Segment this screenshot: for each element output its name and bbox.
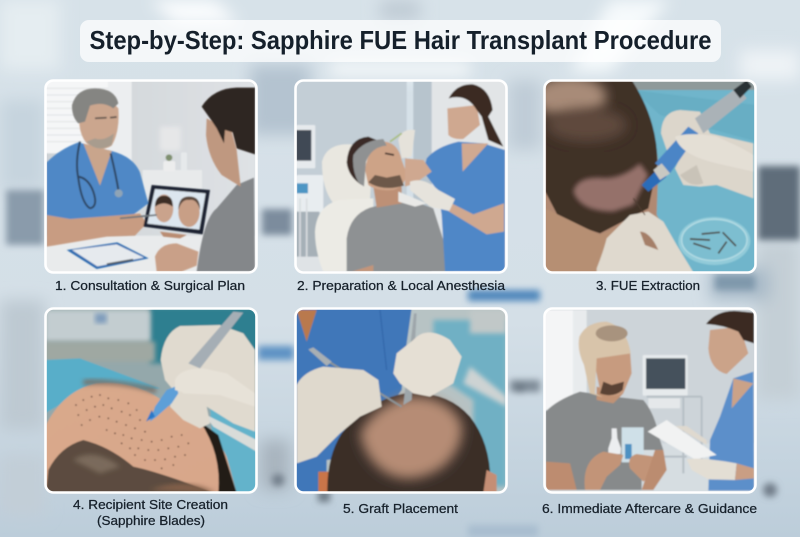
caption 4: (Sapphire Blades) — [97, 513, 205, 528]
petri dish — [678, 217, 750, 265]
caption 4 — [73, 497, 228, 528]
serum and pack — [608, 428, 621, 454]
nurse — [423, 142, 505, 272]
caption 1: 1. Consultation & Surgical Plan — [55, 278, 245, 293]
panel: immediate aftercare and guidance — [543, 307, 757, 493]
caption 6: 6. Immediate Aftercare & Guidance — [542, 501, 757, 516]
scalp — [45, 383, 237, 493]
bandage — [579, 322, 631, 397]
head — [327, 393, 490, 493]
clipboard — [67, 242, 149, 269]
doctor's scrubs — [46, 142, 149, 220]
caption 5: 5. Graft Placement — [343, 501, 458, 516]
panel: FUE extraction — [546, 82, 754, 272]
panel: consultation and surgical plan — [40, 75, 260, 275]
reclining chair — [322, 144, 373, 203]
title banner — [80, 20, 721, 62]
forceps — [330, 362, 402, 408]
caption 2: 2. Preparation & Local Anesthesia — [297, 278, 506, 293]
monitor — [643, 355, 688, 396]
panel: recipient site creation — [43, 307, 260, 493]
glove — [161, 325, 255, 432]
document — [648, 420, 717, 459]
panel: graft placement — [293, 307, 513, 497]
patient — [197, 178, 255, 272]
recipient site dots — [75, 394, 189, 469]
left glove — [297, 367, 382, 463]
caption 3: 3. FUE Extraction — [596, 278, 700, 293]
title banner: Step-by-Step: Sapphire FUE Hair Transplant Procedure — [90, 25, 712, 55]
nurse — [708, 372, 754, 491]
tablet — [143, 185, 210, 234]
patient — [546, 392, 663, 490]
caption 4: 4. Recipient Site Creation — [73, 497, 228, 512]
sapphire pen — [188, 312, 243, 368]
panel: preparation and local anesthesia — [293, 75, 508, 275]
upper glove and tool — [661, 110, 753, 198]
lower glove — [597, 212, 695, 275]
head — [365, 142, 407, 190]
patient shirt — [347, 200, 453, 272]
panel frames — [46, 80, 756, 492]
scrubs — [295, 308, 412, 493]
head — [546, 114, 659, 267]
